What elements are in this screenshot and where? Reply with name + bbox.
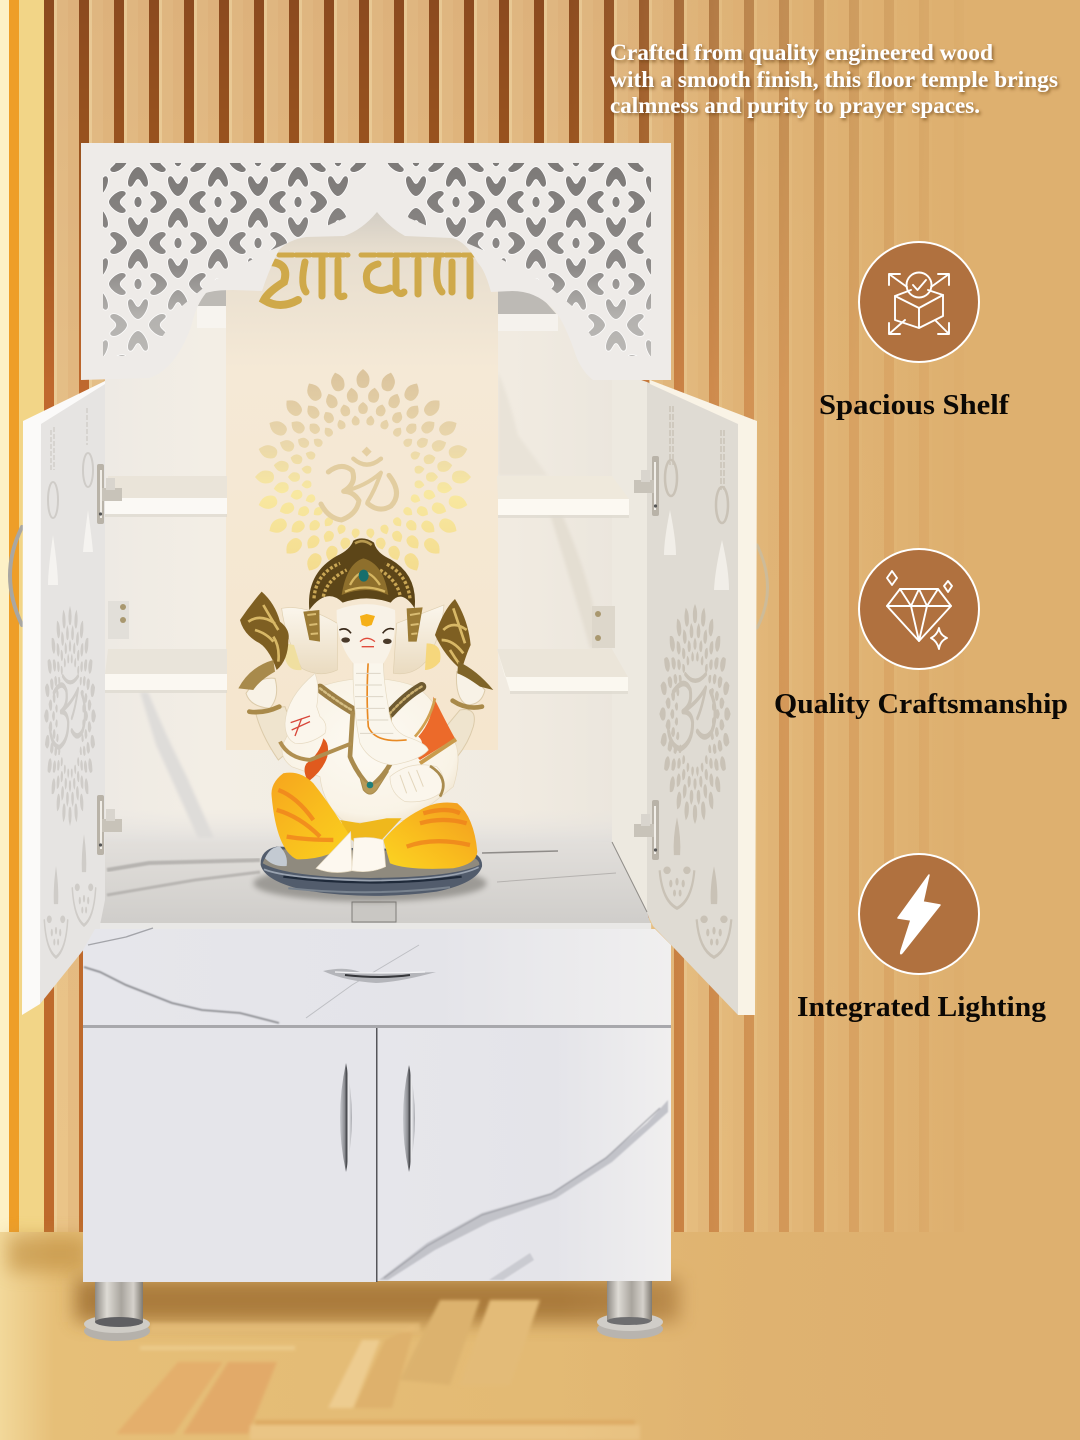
body bbox=[282, 678, 458, 823]
left door carvings bbox=[44, 408, 96, 957]
icon: box with expand arrows bbox=[859, 242, 979, 362]
label: Integrated Lighting bbox=[797, 992, 1046, 1023]
label: Quality Craftsmanship bbox=[774, 689, 1068, 720]
statue base bbox=[261, 847, 482, 896]
om cut-out bbox=[321, 447, 397, 520]
feature: spacious shelf bbox=[819, 242, 1010, 421]
icon: lightning bolt bbox=[859, 854, 979, 974]
orange sash bbox=[280, 697, 456, 782]
statue shadow bbox=[253, 865, 487, 902]
temple: right door bbox=[647, 380, 757, 1015]
temple: legs bbox=[84, 1281, 663, 1341]
face bbox=[337, 604, 395, 663]
temple: shelves bbox=[105, 476, 629, 694]
back arms bbox=[246, 672, 485, 760]
ears bbox=[282, 605, 444, 674]
intro text: with a smooth finish, this floor temple brings bbox=[610, 67, 1058, 93]
drawer handle bbox=[323, 969, 436, 983]
feature: integrated lighting bbox=[797, 854, 1046, 1023]
temple: interior side panel, right bbox=[612, 370, 647, 913]
background: parquet floor bbox=[0, 1232, 1080, 1440]
temple: marble base shelf bbox=[100, 842, 651, 929]
temple: rear door handles bbox=[10, 527, 768, 628]
jaali cut-outs bbox=[103, 163, 651, 356]
temple: drawer bbox=[83, 928, 671, 1025]
crown bbox=[309, 538, 415, 610]
temple: jaali arch header bbox=[81, 143, 671, 380]
mandala cut-out petals bbox=[255, 369, 471, 570]
temple: top shelves behind arch bbox=[197, 285, 558, 331]
bangles bbox=[249, 701, 482, 712]
right door carvings bbox=[659, 406, 731, 957]
trunk bbox=[353, 653, 428, 765]
temple: gold lettering ornament (shubh labh) bbox=[264, 255, 474, 305]
temple: interior back wall bbox=[105, 200, 615, 845]
intro text: calmness and purity to prayer spaces. bbox=[610, 93, 980, 119]
feet bbox=[316, 832, 386, 872]
conch shells bbox=[238, 592, 493, 690]
dhoti bbox=[271, 773, 477, 869]
intro text: Crafted from quality engineered wood bbox=[610, 40, 993, 66]
temple: lower cabinet doors bbox=[83, 1025, 671, 1282]
temple: cream back panel with mandala bbox=[226, 205, 498, 750]
ganesha statue bbox=[238, 538, 493, 902]
intro text bbox=[610, 40, 1058, 119]
marble vein bbox=[379, 1100, 668, 1280]
cabinet handles bbox=[340, 1063, 352, 1172]
temple: hinges and brackets bbox=[97, 456, 659, 860]
front left hand, blessing bbox=[285, 673, 326, 744]
background: fade to plain tan on the right bbox=[560, 0, 1080, 1440]
feature: quality craftsmanship bbox=[774, 549, 1068, 720]
icon: diamond bbox=[859, 549, 979, 669]
front right hand with sweet bbox=[390, 765, 443, 802]
label: Spacious Shelf bbox=[819, 390, 1010, 421]
temple: left door bbox=[22, 381, 105, 1015]
necklace bbox=[320, 687, 422, 794]
